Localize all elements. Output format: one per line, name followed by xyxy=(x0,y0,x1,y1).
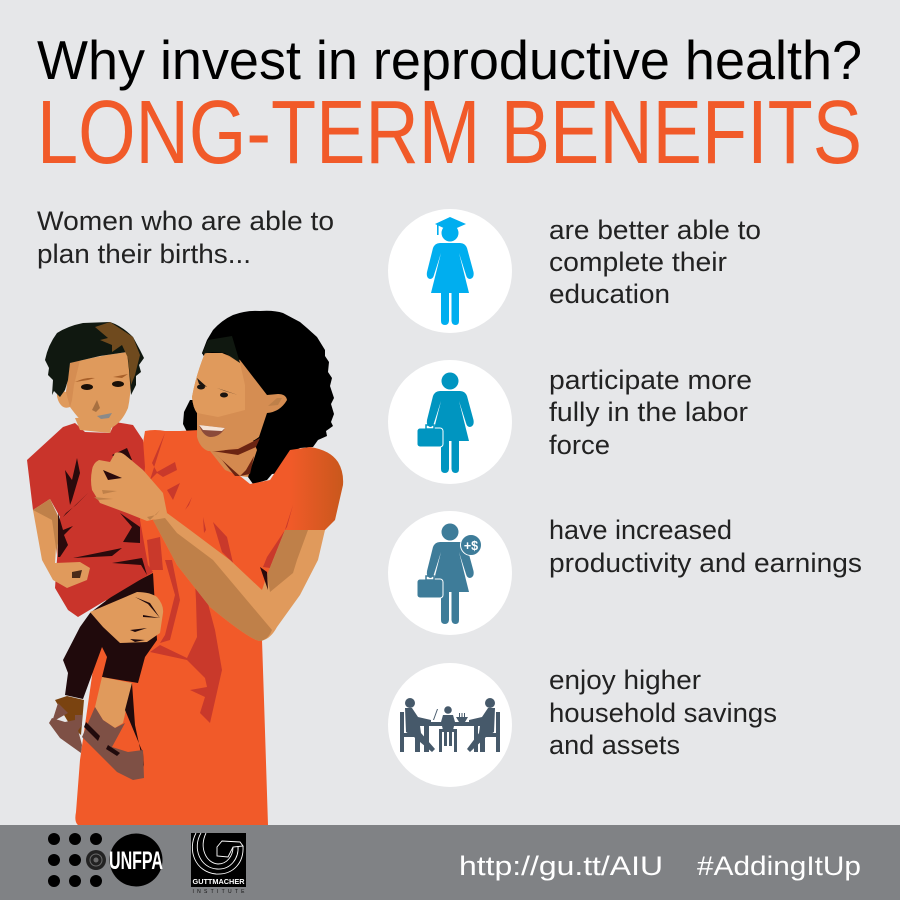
intro text xyxy=(37,206,334,269)
illustration: mother holding child xyxy=(27,311,343,825)
icon: woman with briefcase and money xyxy=(417,524,482,624)
footer hashtag: #AddingItUp xyxy=(697,851,861,881)
child's head xyxy=(57,352,131,431)
text: and assets xyxy=(549,730,680,760)
circle xyxy=(388,511,512,635)
Guttmacher logo xyxy=(191,833,246,895)
panel: education xyxy=(388,209,761,333)
child's hair xyxy=(45,322,144,397)
mother's face xyxy=(192,353,287,451)
intro text: plan their births... xyxy=(37,239,251,269)
shirt shadows xyxy=(58,448,147,575)
text: fully in the labor xyxy=(549,397,748,427)
text: have increased xyxy=(549,515,732,545)
child's lower leg xyxy=(95,677,132,728)
mother's neck and collar xyxy=(210,438,257,477)
mother's hair back xyxy=(183,311,334,484)
child's pants xyxy=(63,573,157,699)
child's shirt xyxy=(27,422,153,617)
text xyxy=(549,665,777,760)
circle xyxy=(388,663,512,787)
panel: labor force xyxy=(388,360,752,484)
mother's eyes xyxy=(197,378,238,395)
Guttmacher logo: GUTTMACHER xyxy=(192,877,245,886)
icon: woman with briefcase xyxy=(417,372,474,473)
child's face detail xyxy=(75,374,128,382)
child's arm xyxy=(33,499,90,588)
text xyxy=(549,365,752,460)
icon: woman with briefcase and money: +$ xyxy=(464,539,478,553)
mother's raised hand xyxy=(91,452,167,521)
text: complete their xyxy=(549,247,727,277)
text: force xyxy=(549,430,610,460)
text: are better able to xyxy=(549,215,761,245)
icon: family at table xyxy=(400,698,500,752)
UNFPA logo: UNFPA xyxy=(109,847,163,875)
footer url: http://gu.tt/AIU xyxy=(459,851,663,881)
dress folds xyxy=(147,433,293,723)
text: enjoy higher xyxy=(549,665,701,695)
text xyxy=(549,515,862,578)
UNFPA logo xyxy=(48,833,163,887)
mother's dress xyxy=(75,430,343,825)
panel: productivity xyxy=(388,511,862,635)
mother's hand holding leg xyxy=(90,592,163,643)
mother's right arm xyxy=(153,513,325,641)
child's neck xyxy=(75,416,115,433)
icon: woman with graduation cap xyxy=(427,217,474,325)
text: household savings xyxy=(549,698,777,728)
circle xyxy=(388,209,512,333)
footer bar xyxy=(0,825,900,900)
intro text: Women who are able to xyxy=(37,206,334,236)
Guttmacher logo: INSTITUTE xyxy=(192,889,245,895)
text: productivity and earnings xyxy=(549,548,862,578)
child's hand on arm xyxy=(72,570,82,578)
title: Why invest in reproductive health? xyxy=(37,29,862,91)
text: participate more xyxy=(549,365,752,395)
text xyxy=(549,215,761,309)
child's shoes xyxy=(55,696,84,735)
mother's smile xyxy=(199,425,225,437)
circle xyxy=(388,360,512,484)
text: education xyxy=(549,279,670,309)
panel: savings xyxy=(388,663,777,787)
